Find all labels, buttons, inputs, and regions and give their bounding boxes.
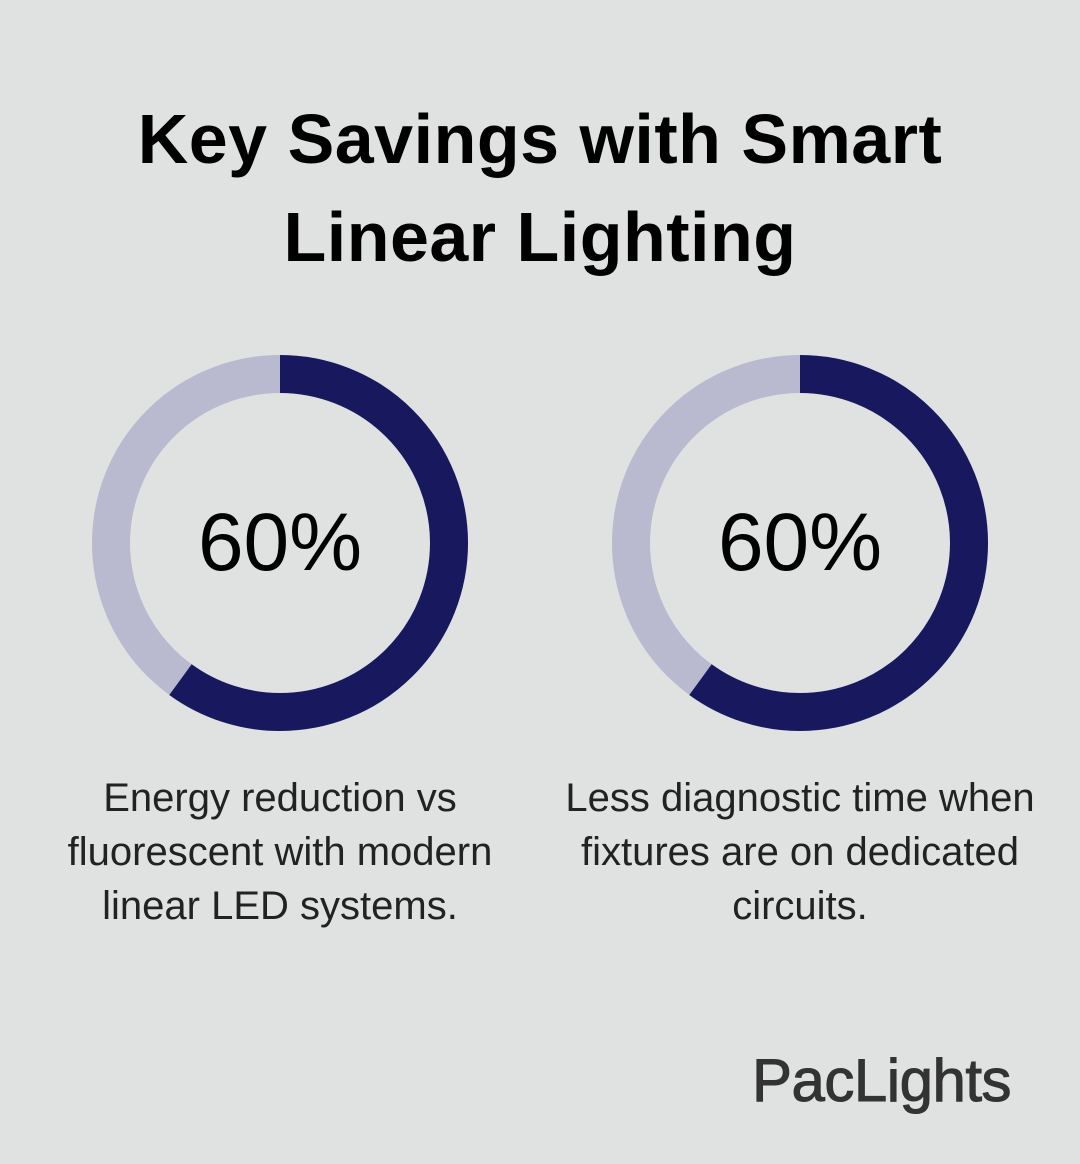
title: Linear Lighting (283, 198, 797, 276)
text: diagnostic description: Less diagnostic time when fixtures are on dedicated circuits. (565, 776, 1035, 928)
stat: 60% diagnostic: 60% (718, 497, 882, 588)
text: energy description: Energy reduction vs fluorescent with modern linear LED systems. (68, 776, 492, 928)
panel: energy reduction ring (92, 355, 468, 731)
stat: 60% energy: 60% (198, 497, 362, 588)
title: Key Savings with Smart (138, 100, 942, 178)
panel: diagnostic time ring (612, 355, 988, 731)
title (138, 100, 942, 276)
logo: PacLights (752, 1047, 1011, 1114)
